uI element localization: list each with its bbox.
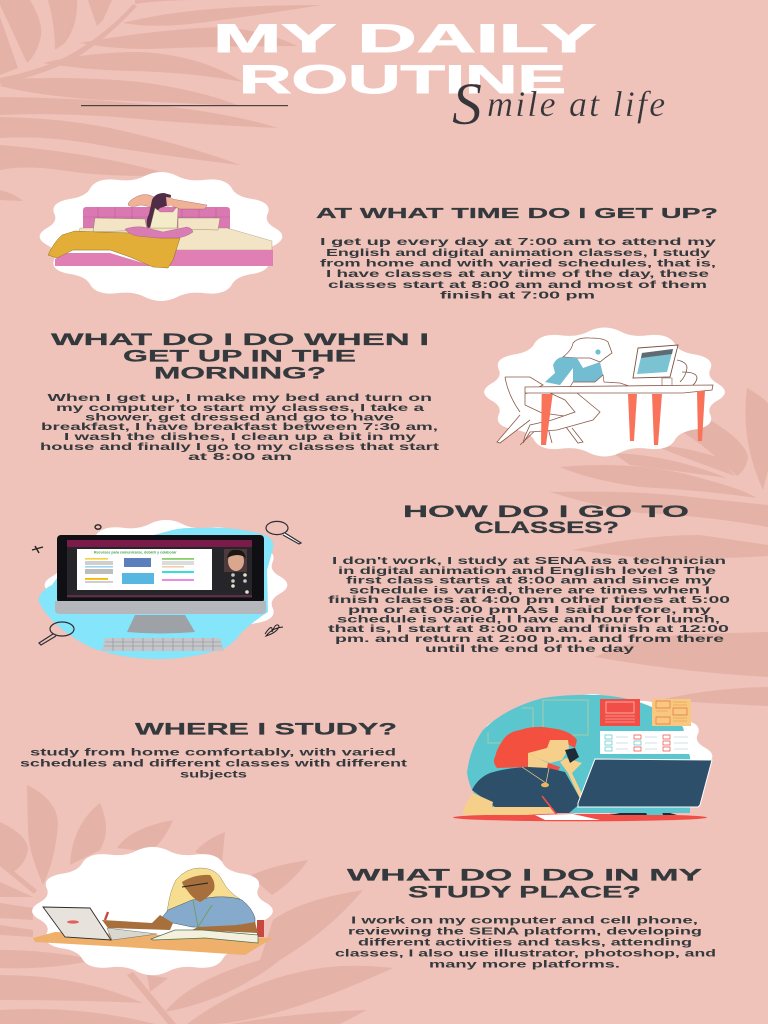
icon: magnifier top right	[266, 521, 301, 544]
heading: classes	[403, 503, 689, 537]
open book	[151, 930, 258, 943]
monitor screen: Recursos para comunicarse, debatir y colaborar	[94, 551, 177, 555]
icon: magnifier bottom left	[39, 622, 74, 645]
bed headboard	[83, 207, 230, 233]
chair	[497, 377, 583, 445]
teal circle backdrop	[467, 695, 690, 813]
icon: small circle	[95, 525, 101, 529]
monitor body	[55, 535, 266, 634]
text block: classes: I don't work, I study at SENA as a technician	[332, 555, 726, 567]
heading: study place	[347, 867, 702, 902]
text block: where i study: schedules and different classes with different	[20, 758, 408, 770]
text block: classes: pm. and return at 2:00 p.m. and from there	[335, 633, 724, 645]
text block: morning: When I get up, I make my bed and turn on	[48, 392, 432, 404]
computer monitor	[578, 759, 712, 815]
white scalloped blob	[40, 172, 282, 301]
white scalloped blob	[484, 328, 725, 456]
heading: classes: CLASSES?	[474, 519, 619, 537]
text block: study place: I work on my computer and cell phone,	[351, 914, 698, 926]
text block: morning: shower, get dressed and go to have	[85, 412, 394, 424]
table	[33, 932, 273, 955]
text block: where i study: subjects	[180, 768, 247, 780]
blond woman	[102, 868, 258, 933]
chair back	[257, 920, 264, 937]
panel: getting up illustration	[40, 172, 282, 301]
cyan blob	[39, 528, 273, 659]
heading: classes: HOW DO I GO TO	[403, 503, 689, 521]
text block: morning	[40, 392, 440, 463]
heading: study place: STUDY PLACE?	[408, 884, 641, 902]
text block: classes: pm or at 08:00 pm As I said before, my	[348, 604, 711, 616]
panel: study place illustration	[32, 847, 273, 975]
text block: classes: that is, I start at 8:00 am and finish at 12:00	[328, 623, 729, 635]
heading: morning: WHAT DO I DO WHEN I	[51, 331, 429, 349]
text block: study place: reviewing the SENA platform, developing	[348, 926, 702, 938]
heading: study place: WHAT DO I DO IN MY	[347, 867, 702, 885]
text block: get up time: I get up every day at 7:00 am to attend my	[320, 236, 716, 248]
text block: morning: my computer to start my classes, I take a	[56, 402, 424, 414]
text block: classes: schedule is varied, I have an hour for lunch,	[337, 614, 720, 626]
computer monitor	[633, 345, 697, 387]
woman stretching	[125, 193, 207, 238]
text block: study place: different activities and tasks, attending	[358, 936, 692, 948]
text block: classes: schedule is varied, there are times when I	[349, 584, 710, 596]
heading: morning: GET UP IN THE	[123, 348, 356, 366]
wall frames	[488, 700, 588, 743]
text block: get up time: classes start at 8:00 am and most of them	[328, 279, 707, 291]
checklist	[600, 731, 695, 754]
text block: get up time	[320, 236, 716, 302]
script subtitle: mile at life	[487, 84, 667, 124]
red poster	[600, 699, 640, 726]
woman at desk	[523, 338, 632, 443]
table surface	[453, 814, 707, 821]
red-haired woman	[463, 727, 600, 820]
laptop	[43, 907, 157, 940]
heading: get up time: AT WHAT TIME DO I GET UP?	[316, 205, 718, 222]
bed mattress and base	[55, 228, 273, 266]
heading: where i study: WHERE I STUDY?	[135, 720, 397, 738]
text block: study place	[335, 914, 716, 970]
text block: where i study	[20, 746, 408, 780]
yellow blanket	[48, 231, 180, 268]
text block: study place: classes, I also use illustrator, photoshop, and	[335, 948, 716, 960]
title: ROUTINE	[239, 58, 566, 102]
desk top and legs	[525, 385, 713, 445]
text block: classes: until the end of the day	[425, 643, 634, 655]
heading: morning	[51, 331, 429, 383]
background leaf: right	[550, 388, 768, 706]
text block: morning: breakfast, I have breakfast between 7:30 am,	[41, 421, 438, 433]
text block: classes	[328, 555, 730, 655]
text block: morning: house and finally I go to my classes that start	[40, 441, 440, 453]
panel: desk illustration	[484, 328, 725, 456]
text block: classes: in digital animation and English level 3 The	[338, 565, 716, 577]
icon: squiggle	[265, 625, 283, 636]
text block: study place: many more platforms.	[429, 958, 620, 970]
keyboard	[102, 638, 224, 651]
icon: small cross	[32, 546, 43, 553]
heading: morning: MORNING?	[154, 365, 326, 383]
text block: morning: at 8:00 am	[188, 451, 292, 463]
text block: get up time: English and digital animation classes, I study	[326, 247, 710, 259]
panel: phone and computer illustration	[453, 694, 712, 821]
text block: where i study: study from home comfortably, with varied	[30, 746, 396, 758]
title	[213, 17, 597, 102]
text block: classes: first class starts at 8:00 am and since my	[346, 574, 712, 586]
title underline	[81, 105, 288, 106]
white scalloped blob	[472, 694, 712, 818]
background leaf: bottom left	[0, 785, 393, 1024]
orange poster	[652, 699, 691, 726]
text block: get up time: I have classes at any time of the day, these	[326, 268, 709, 280]
pillows	[93, 218, 220, 232]
title: MY DAILY	[213, 17, 597, 61]
white scalloped blob	[32, 847, 273, 975]
text block: morning: I wash the dishes, I clean up a bit in my	[64, 431, 416, 443]
text block: get up time: from home and with varied schedules, that is,	[320, 258, 716, 270]
monitor screen	[67, 540, 252, 597]
text block: classes: finish classes at 4:00 pm other times at 5:00	[328, 594, 730, 606]
white scalloped blob	[45, 520, 287, 650]
panel: monitor illustration	[32, 520, 301, 659]
background leaf: top left	[0, 0, 322, 201]
text block: get up time: finish at 7:00 pm	[440, 290, 595, 302]
script subtitle: S	[452, 71, 482, 137]
